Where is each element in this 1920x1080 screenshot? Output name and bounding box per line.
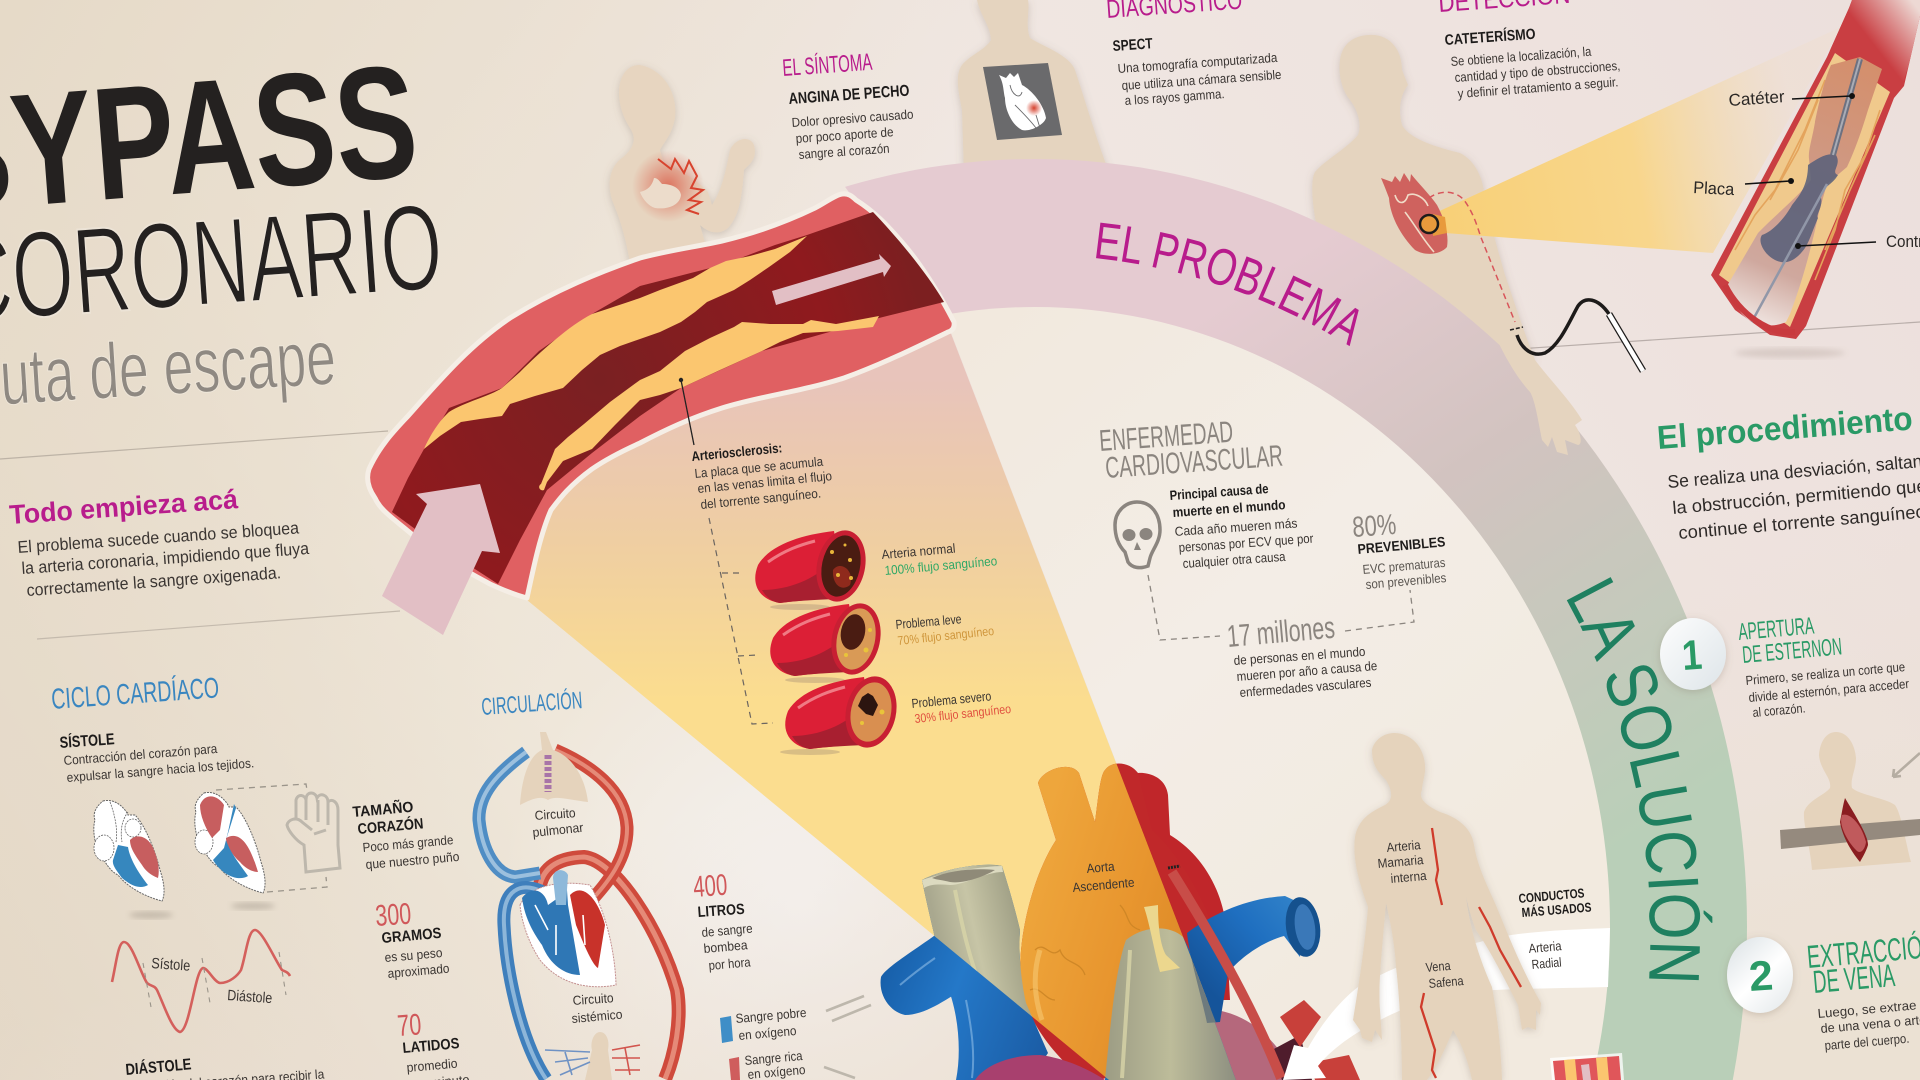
- line: saphenous vein: [1421, 993, 1436, 1078]
- ligament: [1144, 905, 1180, 972]
- step 2 text: parte del cuerpo.: [1824, 1031, 1910, 1053]
- icon: striped graft: [1550, 1053, 1624, 1080]
- artery: cross-section: [368, 194, 954, 635]
- text block: 80 percent: son prevenibles: [1365, 570, 1447, 592]
- diagram: circulation: Circuito: [572, 990, 614, 1008]
- legend: blood types: Sangre rica: [744, 1048, 804, 1068]
- label: placa: Placa: [1693, 178, 1735, 199]
- sector: zoom cone: [527, 331, 1238, 1080]
- text block: todo empieza aca: correctamente la sangre oxigenada.: [26, 563, 282, 600]
- label: aorta: Ascendente: [1072, 875, 1135, 895]
- text block: el procedimiento: continue el torrente sanguíneo: [1678, 501, 1920, 543]
- text block: deteccion: [1437, 0, 1621, 101]
- icon: mild problem artery: [770, 599, 887, 683]
- ring label: la solucion: LA SOLUCIÓN: [1566, 577, 1712, 980]
- text block: enfermedad cardiovascular: ENFERMEDAD: [1098, 416, 1234, 458]
- label: cateter: Catéter: [1728, 87, 1785, 110]
- arrow: flow: [772, 254, 891, 305]
- text block: diastole: DIÁSTOLE: [125, 1054, 192, 1079]
- icon: scan with heart: [983, 63, 1062, 140]
- text block: todo empieza aca: El problema sucede cuando se bloquea: [17, 518, 300, 557]
- legend: blood types: Sangre pobre: [735, 1005, 807, 1026]
- arrow: entry: [382, 484, 500, 635]
- label: cateter: [1728, 87, 1855, 110]
- text block: 80 percent: 80%: [1351, 509, 1397, 544]
- text block: el sintoma: EL SÍNTOMA: [782, 49, 873, 82]
- stat: 400 litros: bombea: [703, 937, 749, 956]
- figure: catheter patient: [1312, 35, 1535, 360]
- stat: tamano corazon: CORAZÓN: [357, 814, 424, 838]
- text block: arteriosclerosis: [691, 440, 833, 512]
- stat: 70 latidos: 70: [396, 1008, 422, 1043]
- figure: grafting sites body: Safena: [1428, 973, 1465, 991]
- text block: ciclo cardiaco: Contracción del corazón para: [63, 741, 218, 768]
- icon: heart with catheter route: [1381, 173, 1643, 371]
- label: normal artery: 100% flujo sanguíneo: [884, 553, 998, 578]
- legend: blood types: [720, 996, 871, 1080]
- label: aorta: Aorta: [1086, 859, 1116, 876]
- text block: ciclo cardiaco: expulsar la sangre hacia los tejidos.: [66, 755, 255, 785]
- text block: arteriosclerosis: Arteriosclerosis:: [691, 440, 783, 464]
- icon: skull: [1115, 502, 1160, 568]
- dashes: heart to fist: [216, 784, 327, 892]
- icon: heart in circulation: [520, 883, 616, 987]
- icon: beam of light: [1433, 27, 1841, 253]
- stat: 300 gramos: aproximado: [387, 961, 450, 981]
- text block: deteccion: cantidad y tipo de obstrucciones,: [1454, 58, 1621, 85]
- text block: el sintoma: Dolor opresivo causado: [791, 107, 914, 130]
- figure: grafting sites body: Arteria: [1386, 837, 1422, 855]
- label: conductos: Arteria: [1528, 938, 1563, 956]
- step 1 text: APERTURA: [1737, 612, 1815, 646]
- figure: SPECT patient: [958, 0, 1110, 175]
- systemic red loop: [539, 857, 679, 1079]
- stat: 400 litros: 400: [692, 869, 728, 904]
- text block: principal causa: [1169, 481, 1314, 571]
- pulmonary red loop: [555, 750, 627, 902]
- arrow: graft ribbon: [1283, 928, 1610, 1080]
- plaque: lower: [539, 316, 879, 490]
- figure: open chest: [1780, 732, 1920, 870]
- diagram: circulation: pulmonar: [532, 820, 585, 840]
- text block: arteriosclerosis: La placa que se acumula: [694, 454, 824, 481]
- diagram: circulation: CIRCULACIÓN: [481, 687, 583, 721]
- text block: principal causa: cualquier otra causa: [1182, 549, 1287, 571]
- step 1 text: DE ESTERNON: [1741, 633, 1843, 669]
- stat: 300 gramos: GRAMOS: [381, 925, 442, 947]
- systemic blue loop: [504, 888, 546, 1079]
- label: contraste: [1795, 232, 1920, 251]
- step 1 text: [1737, 612, 1910, 720]
- chart: cardiac cycle curve: Diástole: [227, 987, 273, 1007]
- stat: 17 millones: mueren por año a causa de: [1236, 658, 1378, 684]
- stat: 300 gramos: es su peso: [384, 945, 443, 965]
- ring: el problema / la solucion: [845, 159, 1747, 1080]
- icon: lungs: [520, 732, 588, 805]
- text block: todo empieza aca: [8, 484, 310, 600]
- natural vessels: [881, 764, 1324, 1080]
- text block: ciclo cardiaco: CICLO CARDÍACO: [50, 671, 220, 716]
- text block: el sintoma: sangre al corazón: [798, 141, 890, 162]
- label: conductos: Radial: [1531, 954, 1562, 972]
- icon: normal artery: [755, 526, 872, 610]
- text block: principal causa: Principal causa de: [1169, 481, 1269, 503]
- pulmonary blue loop: [479, 752, 540, 877]
- figure: chest pain patient: [610, 65, 755, 275]
- text block: el procedimiento: la obstrucción, permitiendo que: [1672, 476, 1920, 518]
- figure: grafting sites body: Mamaria: [1377, 852, 1425, 871]
- label: severe problem: [911, 688, 1012, 726]
- label: conductos: CONDUCTOS: [1518, 885, 1585, 906]
- stat: 70 latidos: LATIDOS: [402, 1035, 460, 1057]
- figure: grafting sites body: interna: [1390, 868, 1428, 886]
- text block: el procedimiento: El procedimiento: [1656, 399, 1914, 456]
- text block: deteccion: Se obtiene la localización, la: [1450, 44, 1592, 69]
- heart: main illustration: [881, 764, 1360, 1080]
- text block: el sintoma: por poco aporte de: [795, 124, 894, 146]
- icon: catheter cable: [1517, 300, 1609, 354]
- text block: el procedimiento: [1656, 399, 1920, 543]
- text block: diagnostico: Una tomografía computarizada: [1117, 50, 1279, 76]
- label: normal artery: Arteria normal: [881, 541, 956, 562]
- illustration: artery with catheter: [1693, 0, 1920, 358]
- line: mammary artery: [1432, 828, 1442, 905]
- text block: todo empieza aca: Todo empieza acá: [8, 484, 240, 530]
- text block: enfermedad cardiovascular: CARDIOVASCULAR: [1104, 440, 1284, 485]
- stat: 70 latidos: promedio: [406, 1056, 458, 1075]
- stat: 17 millones: [1226, 610, 1378, 700]
- label: mild problem: 70% flujo sanguíneo: [897, 624, 995, 648]
- chart: cardiac cycle curve: Sístole: [151, 955, 191, 975]
- step 2 badge: [1727, 937, 1793, 1013]
- icon: pain burst: [658, 159, 703, 214]
- dashes: statistics connector: [1148, 575, 1414, 640]
- stat: 70 latidos: [396, 1008, 470, 1080]
- text block: el sintoma: ANGINA DE PECHO: [788, 83, 910, 108]
- text block: arteriosclerosis: del torrente sanguíneo.: [700, 485, 822, 512]
- line: radial artery: [1479, 907, 1521, 987]
- tube: mammary graft: [1172, 872, 1281, 1078]
- label: aorta: [1072, 859, 1135, 895]
- step 1 text: al corazón.: [1752, 700, 1806, 720]
- stat: 300 gramos: 300: [374, 898, 412, 933]
- artery lumen: [392, 212, 944, 584]
- stat: 400 litros: [692, 869, 753, 973]
- figure: grafting sites body: [1353, 733, 1541, 1080]
- text block: principal causa: personas por ECV que por: [1178, 531, 1314, 555]
- label: normal artery: [881, 541, 998, 578]
- label: conductos: [1518, 885, 1592, 972]
- stat: tamano corazon: [352, 798, 460, 872]
- text block: 80 percent: PREVENIBLES: [1357, 533, 1446, 557]
- label: mild problem: [895, 611, 995, 648]
- stat: 17 millones: de personas en el mundo: [1233, 644, 1366, 668]
- text block: principal causa: Cada año mueren más: [1174, 515, 1298, 539]
- plaque: upper: [424, 236, 807, 449]
- text block: diagnostico: que utiliza una cámara sensible: [1121, 67, 1282, 93]
- text block: diagnostico: SPECT: [1112, 35, 1153, 55]
- label: conductos: MÁS USADOS: [1521, 900, 1592, 920]
- chart: cardiac cycle curve: [112, 930, 290, 1032]
- text block: diagnostico: a los rayos gamma.: [1124, 86, 1225, 108]
- icon: fist: [287, 793, 340, 872]
- figure: grafting sites body: Vena: [1425, 958, 1452, 975]
- step 2 text: [1805, 928, 1920, 1053]
- step 1 badge: 1: [1680, 631, 1704, 679]
- label: placa: [1693, 178, 1794, 199]
- text block: todo empieza aca: la arteria coronaria, impidiendo que fluya: [21, 539, 310, 578]
- dashed tree: artery types: [709, 518, 773, 724]
- icon: severe problem artery: [780, 672, 903, 755]
- text block: ciclo cardiaco: SÍSTOLE: [59, 729, 115, 752]
- step 2 badge: 2: [1747, 951, 1775, 1000]
- stat: 17 millones: 17 millones: [1226, 610, 1336, 654]
- stat: tamano corazon: TAMAÑO: [352, 798, 414, 821]
- title: [0, 31, 447, 424]
- text block: deteccion: CATETERÍSMO: [1444, 26, 1536, 49]
- text block: 80 percent: EVC prematuras: [1362, 555, 1446, 577]
- icon: heart diastole: [195, 792, 275, 910]
- text block: el sintoma: [782, 49, 914, 162]
- text block: deteccion: y definir el tratamiento a seguir.: [1457, 74, 1619, 101]
- step 1 badge: [1660, 618, 1726, 690]
- red pieces: [1280, 1000, 1360, 1080]
- stat: 400 litros: por hora: [708, 954, 752, 973]
- text block: arteriosclerosis: en las venas limita el flujo: [697, 468, 833, 496]
- tinted vessels inside cone: [922, 764, 1236, 1080]
- label: severe problem: Problema severo: [911, 688, 992, 711]
- stat: tamano corazon: que nuestro puño: [365, 849, 460, 872]
- arrows to heart: [824, 996, 871, 1078]
- label: mild problem: Problema leve: [895, 611, 962, 632]
- stat: 17 millones: enfermedades vasculares: [1239, 675, 1372, 700]
- text block: enfermedad cardiovascular: [1098, 416, 1284, 485]
- figure: catheter patient arm: [1478, 275, 1582, 455]
- pointer line: arteriosclerosis: [679, 378, 694, 445]
- text block: diastole: [125, 1054, 325, 1080]
- icon: person below: [585, 1032, 612, 1080]
- ring label: el problema: EL PROBLEMA: [1096, 222, 1359, 346]
- diagram: circulation: sistémico: [571, 1007, 623, 1026]
- text block: principal causa: muerte en el mundo: [1172, 497, 1286, 520]
- label: severe problem: 30% flujo sanguíneo: [914, 702, 1012, 726]
- legend: blood types: en oxígeno: [738, 1023, 797, 1043]
- text block: ciclo cardiaco: [50, 671, 255, 785]
- stat: 400 litros: de sangre: [701, 921, 753, 940]
- stat: 300 gramos: [374, 898, 450, 981]
- diagram: circulation: Circuito: [534, 805, 576, 823]
- icon: heart systole: [94, 800, 173, 918]
- text block: 80 percent: [1351, 509, 1447, 592]
- stat: tamano corazon: Poco más grande: [362, 832, 454, 855]
- stat: 400 litros: LITROS: [697, 901, 745, 921]
- text block: diagnostico: [1105, 0, 1282, 108]
- diagram: circulation: [479, 687, 679, 1080]
